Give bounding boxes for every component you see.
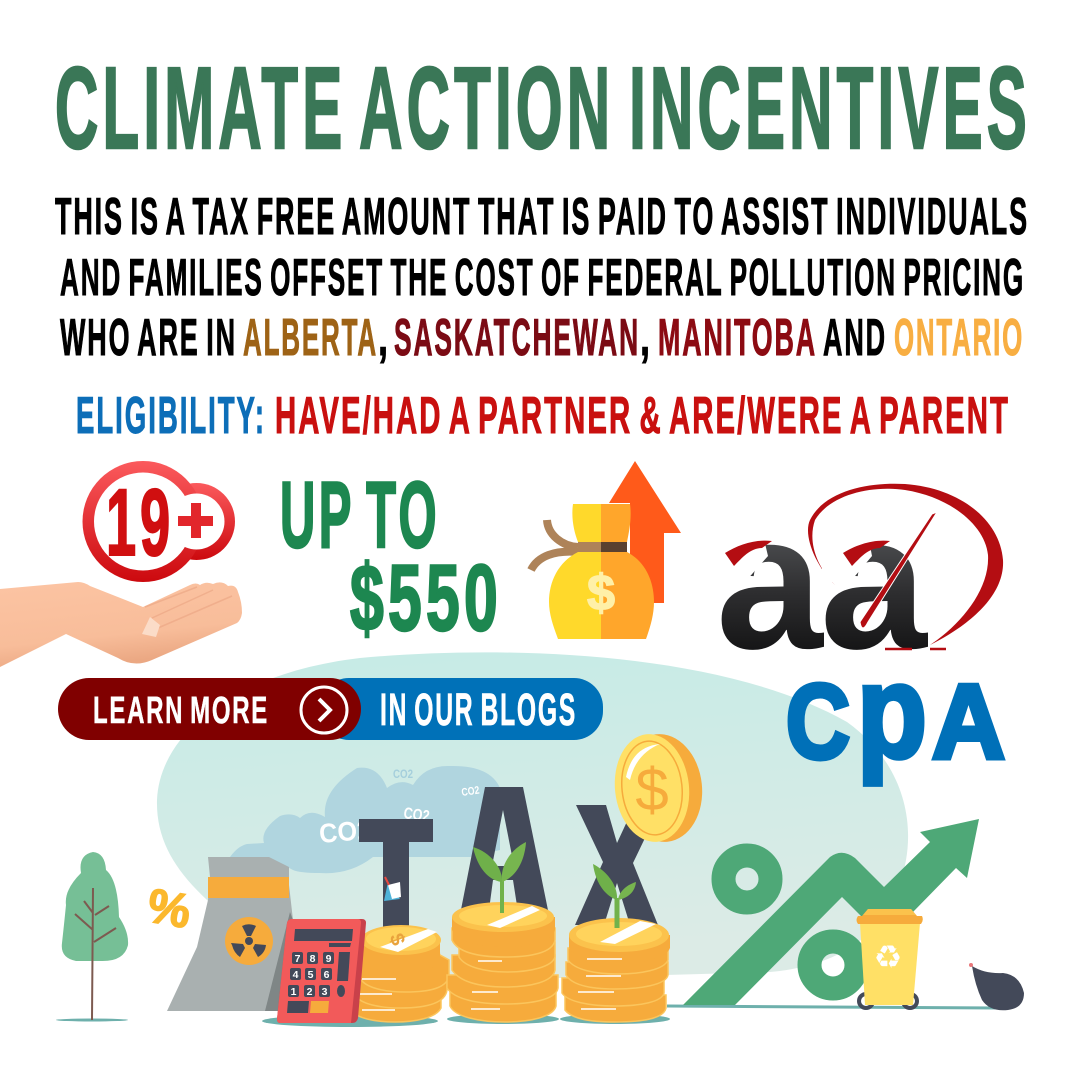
cloud with CO2 labels: CO2 <box>393 767 413 781</box>
up to $550: $550 <box>350 545 502 650</box>
eligibility line: ELIGIBILITY: <box>76 387 266 445</box>
cloud with CO2 labels: CO2 <box>461 785 480 799</box>
button: learn more in our blogs: LEARN MORE <box>93 690 269 732</box>
up to $550: UP TO <box>280 462 440 567</box>
ground line <box>667 1006 997 1008</box>
logo: aa CPA: a <box>716 474 824 689</box>
icon: calculator: 5 <box>308 969 314 981</box>
up to $550 <box>280 462 502 650</box>
cloud with CO2 labels <box>230 766 500 873</box>
icon: 19+ badge: 19 <box>106 470 174 576</box>
button: learn more in our blogs <box>58 678 603 740</box>
icon: recycling bin <box>856 909 923 1008</box>
icon: calculator: 4 <box>293 969 299 981</box>
coin stack 1 <box>262 925 449 1027</box>
button: learn more in our blogs: IN OUR BLOGS <box>380 684 577 735</box>
cloud with CO2 labels: CO2 <box>402 805 431 826</box>
icon: gold coin <box>610 730 707 846</box>
icon: percent sign: % <box>143 880 195 939</box>
icon: tree <box>56 852 128 1022</box>
icon: calculator: 6 <box>324 969 330 981</box>
icon: calculator: 3 <box>322 986 328 998</box>
logo: aa CPA: a <box>820 474 928 689</box>
icon: recycling bin: ♻ <box>874 938 902 976</box>
icon: money bag with arrow <box>531 461 681 639</box>
text block: description: AND <box>823 309 887 367</box>
icon: note pinned on T <box>384 877 401 901</box>
text block: description: , <box>640 309 650 367</box>
text block: description: , <box>378 309 388 367</box>
letters: TAX graphic <box>359 787 658 935</box>
icon: gold coin: $ <box>635 756 669 823</box>
text block: description <box>55 188 1029 367</box>
cloud with CO2 labels: CO2 <box>318 815 372 849</box>
icon: calculator <box>277 919 366 1023</box>
icon: calculator: 7 <box>295 953 301 965</box>
coin stack 1: $ <box>385 931 409 949</box>
coin stack 3 with sprout <box>560 864 670 1024</box>
icon: calculator: 9 <box>326 953 332 965</box>
icon: calculator: 8 <box>310 953 316 965</box>
chart: rising arrow with percent <box>683 819 979 1005</box>
icon: calculator: 2 <box>307 986 313 998</box>
text block: description: SASKATCHEWAN <box>394 309 640 367</box>
icon: open hand <box>0 582 242 667</box>
icon: nuclear tower <box>167 857 293 1011</box>
background blob <box>157 652 908 978</box>
logo: aa CPA <box>715 474 1005 785</box>
logo: aa CPA: p <box>857 638 927 785</box>
text block: description: MANITOBA <box>658 309 817 367</box>
text block: description: WHO ARE IN <box>60 309 237 367</box>
logo: aa CPA: A <box>932 663 1005 781</box>
coin stack 2 with sprout <box>447 842 559 1024</box>
icon: money bag with arrow: $ <box>587 565 615 621</box>
icon: calculator: 1 <box>291 986 297 998</box>
logo: aa CPA: C <box>786 663 850 781</box>
text block: description: ALBERTA <box>243 309 378 367</box>
icon: trash bag <box>969 963 1024 1010</box>
icon: 19+ badge <box>82 461 235 582</box>
